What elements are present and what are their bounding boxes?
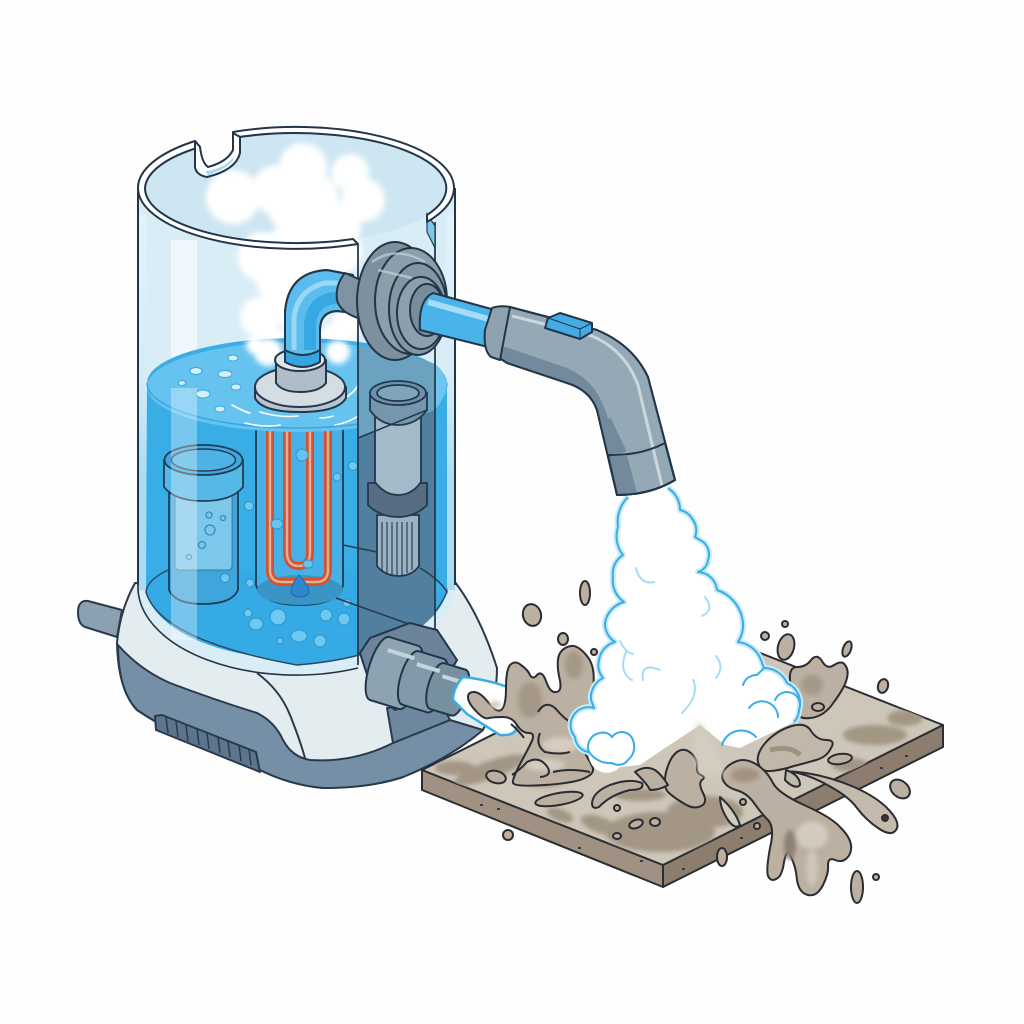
pump base: [78, 582, 497, 788]
central mud blob: [665, 750, 705, 807]
base body: [117, 582, 497, 788]
floor ring: [146, 570, 447, 665]
slab sides: [422, 770, 663, 887]
drip blotches: [731, 768, 828, 886]
surface bubbles: [178, 355, 241, 412]
foam plume: [571, 488, 800, 775]
left mud blotches: [489, 651, 583, 771]
rim front arc: [138, 141, 358, 249]
pipe collar: [485, 306, 510, 360]
left mud mass: [468, 646, 594, 786]
heating coil inner: [287, 430, 310, 566]
cutaway dark panel: [336, 214, 447, 668]
notch band: [195, 133, 240, 177]
steam inside tank: [206, 143, 385, 361]
airborne droplets: [503, 581, 914, 903]
grey connector: [337, 273, 372, 318]
base grey skirt: [118, 645, 483, 788]
surface ripples: [232, 385, 358, 426]
illustration: [77, 126, 944, 904]
front rim and glass outlines: [138, 127, 455, 675]
outlet coupling: [360, 623, 477, 727]
steam over surface: [246, 336, 350, 366]
concrete slab: [422, 630, 943, 887]
mud splash: [468, 581, 914, 903]
floating bubbles: [220, 462, 358, 647]
right upper mud blob: [790, 657, 848, 718]
coil base drop: [291, 575, 309, 597]
elbow tube: [285, 270, 353, 357]
foam outline glow: [571, 488, 800, 752]
left mud inner lines: [511, 705, 590, 777]
foam outline: [571, 488, 800, 752]
slab mud foam scene: [360, 488, 943, 903]
tan plume under foam: [694, 722, 725, 775]
fitting disc: [255, 387, 346, 412]
vent slots: [155, 715, 260, 772]
flange and outlet pipe: [357, 242, 495, 360]
mottled patches: [435, 710, 923, 852]
rim back arc: [233, 127, 454, 222]
highlight bar on glass: [171, 388, 197, 640]
water body: [146, 338, 447, 665]
spout end band: [608, 443, 675, 495]
side inlet pipe: [78, 601, 122, 637]
heating coil outer: [270, 430, 328, 582]
water jet from outlet: [453, 677, 522, 735]
blue pipe: [420, 293, 495, 347]
left filter cartridge: [164, 445, 243, 604]
outlet recess: [387, 700, 450, 743]
base panel seam: [257, 673, 305, 758]
slab side specks: [480, 756, 908, 869]
right lower mud mass: [758, 725, 833, 771]
flange discs: [357, 242, 447, 360]
small mud smears: [592, 781, 642, 808]
gooseneck spout: [485, 306, 675, 495]
tank glass back: [138, 127, 455, 673]
inner foam arcs: [620, 568, 720, 713]
right filter: [358, 381, 427, 576]
water surface: [147, 336, 447, 432]
slab top: [422, 630, 943, 865]
heater chamber: [256, 425, 343, 605]
foam fill: [571, 488, 800, 773]
right filter grille: [377, 515, 419, 576]
notch opening: [192, 124, 242, 167]
right streak: [792, 772, 897, 833]
top fitting and elbow tube: [255, 270, 372, 412]
foam puffs: [588, 668, 800, 765]
dripping mud: [722, 760, 851, 895]
blue tag: [545, 313, 592, 339]
